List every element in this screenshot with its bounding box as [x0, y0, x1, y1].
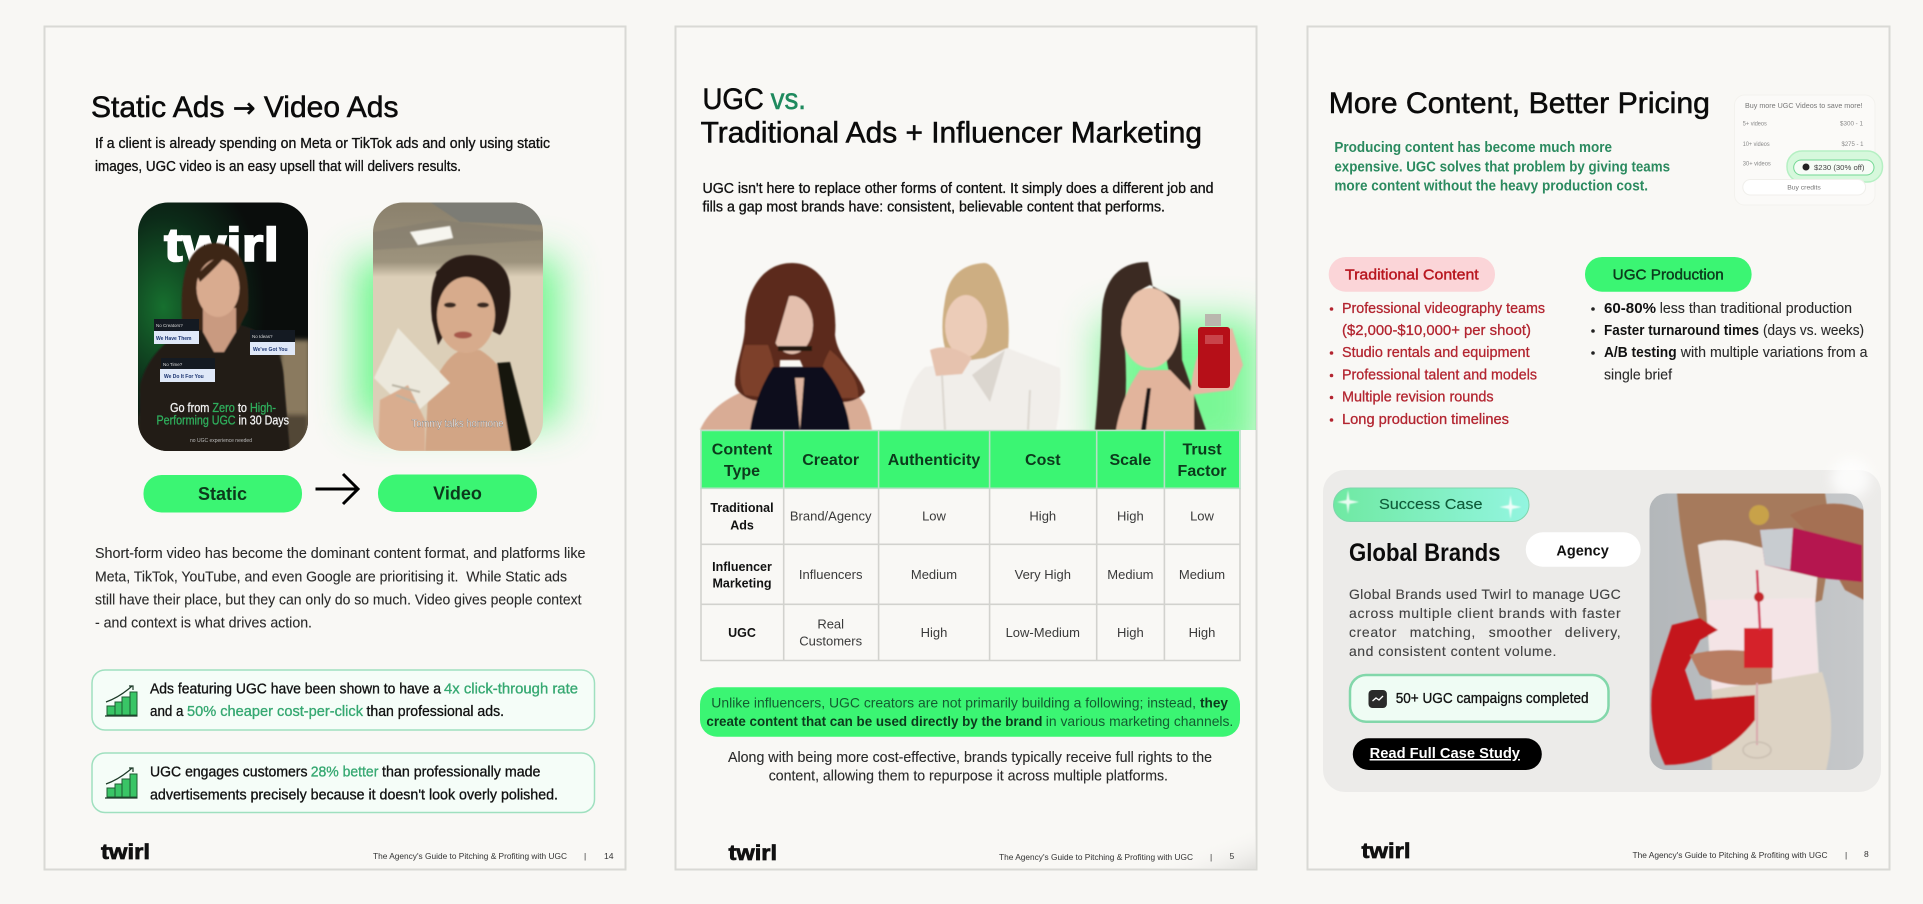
- list: ugc benefits: Faster turnaround times: [1604, 323, 1759, 339]
- case description: smoother: [1489, 624, 1552, 640]
- table header: Content: [712, 442, 773, 458]
- green intro text: expensive. UGC solves that problem by giving teams: [1334, 160, 1670, 176]
- callout: click-through rate: [92, 670, 594, 730]
- pricing card: $300 - 1: [1840, 120, 1863, 128]
- table row: influencer marketing: Medium: [1107, 567, 1154, 582]
- book: [374, 328, 450, 451]
- closing text: Along with being more cost-effective, brands typically receive full rights to the: [728, 750, 1212, 766]
- image: static ad phone: No Time?: [163, 362, 183, 367]
- table row: influencer marketing: Very High: [1015, 567, 1071, 582]
- footer: 8: [1864, 849, 1869, 859]
- table row: traditional ads: [710, 501, 1215, 532]
- table row: traditional ads: Brand/Agency: [790, 508, 872, 524]
- table row: influencer marketing: Marketing: [712, 576, 772, 590]
- sparkle: [1831, 458, 1871, 498]
- table row: traditional ads: Ads: [730, 518, 754, 532]
- table row: influencer marketing: Medium: [911, 567, 957, 582]
- table header: Authenticity: [888, 452, 980, 469]
- pricing card: 5+ videos: [1743, 120, 1767, 128]
- button: video: [378, 474, 537, 512]
- image: static ad phone: Performing UGC in 30 Days: [156, 412, 289, 428]
- callout: green note: [700, 687, 1240, 737]
- title: [701, 83, 1202, 150]
- image: static ad phone: We've Got You: [253, 347, 288, 353]
- table row: ugc: Real: [817, 616, 844, 632]
- ad headline: Go from Zero to High-: [170, 400, 276, 415]
- table row: ugc: UGC: [728, 626, 756, 640]
- pill: traditional content: [1329, 257, 1495, 292]
- pricing card: Buy more UGC Videos to save more!: [1745, 101, 1863, 110]
- arrow: [316, 474, 358, 504]
- corner shading: [1130, 820, 1256, 869]
- list: ugc benefits: with multiple variations from a: [1680, 345, 1868, 361]
- callout: green note: Unlike influencers, UGC creators are not primarily building a following; instead,: [711, 696, 1196, 710]
- person: ugc creator: [1095, 262, 1243, 430]
- case description: matching,: [1410, 624, 1475, 640]
- list: traditional costs: Professional talent and models: [1342, 368, 1537, 384]
- logo: twirl: [1362, 840, 1410, 863]
- callout: green note: create content that can be used directly by the brand: [706, 714, 1042, 729]
- intro text: fills a gap most brands have: consistent, believable content that performs.: [702, 200, 1165, 216]
- body paragraph: still have their place, but they can only do so much. Video gives people context: [95, 592, 582, 608]
- callout: click-through rate: than professional ads.: [366, 704, 504, 720]
- panel: page 8 more content better pricing: [1308, 26, 1890, 870]
- list: ugc benefits: (days vs. weeks): [1763, 323, 1864, 339]
- image: static ad phone: We Do It For You: [164, 374, 204, 380]
- footer: The Agency's Guide to Pitching & Profiting with UGC: [999, 852, 1193, 862]
- closing text: content, allowing them to repurpose it across multiple platforms.: [769, 768, 1168, 784]
- image: video glow: [355, 258, 560, 423]
- icon: growth chart: [105, 768, 138, 798]
- table row: influencer marketing: Influencer: [712, 560, 772, 574]
- list: traditional costs: Multiple revision rounds: [1342, 390, 1494, 406]
- table header: Type: [724, 463, 760, 480]
- title: More Content, Better Pricing: [1329, 87, 1710, 120]
- button: static: Static: [198, 484, 247, 504]
- table row: ugc: High: [1189, 625, 1215, 640]
- icon: trend: [1368, 690, 1387, 708]
- stat box: [1350, 675, 1608, 722]
- table row: traditional ads: Low: [1190, 508, 1215, 524]
- buy credits button: [1743, 180, 1866, 195]
- table row: ugc: [728, 616, 1215, 648]
- case heading: Global Brands: [1349, 539, 1500, 567]
- body paragraph: Meta, TikTok, YouTube, and even Google are prioritising it. While Static ads: [95, 570, 567, 586]
- body paragraph: [95, 546, 586, 632]
- table row: traditional ads: Traditional: [710, 501, 774, 515]
- case description: delivery,: [1565, 624, 1621, 640]
- buy credits button: Buy credits: [1787, 184, 1821, 192]
- logo in ad: twirl: [164, 218, 279, 271]
- list: traditional costs: Long production timelines: [1342, 412, 1509, 428]
- button: read full case study: Read Full Case Study: [1370, 745, 1521, 762]
- list: ugc benefits: [1591, 301, 1868, 384]
- callout: click-through rate: Ads featuring UGC have been shown to have a: [150, 682, 442, 698]
- image: static ad phone: [138, 202, 310, 452]
- image: ugc video phone: Tommy talks hormone: [412, 418, 504, 430]
- table header: Scale: [1109, 452, 1151, 469]
- pill: success case: Success Case: [1379, 496, 1482, 513]
- footer: The Agency's Guide to Pitching & Profiting with UGC: [373, 851, 567, 861]
- image: ugc video phone: [373, 202, 543, 452]
- image: drink pouring photo: [1649, 493, 1864, 771]
- pricing card: 30+ videos: [1743, 160, 1771, 168]
- pill: ugc production: UGC Production: [1613, 266, 1724, 284]
- case description: creator: [1349, 624, 1397, 640]
- closing text: [728, 750, 1212, 784]
- table header: Trust: [1182, 442, 1222, 458]
- image: static ad phone: No Creators?: [156, 323, 183, 328]
- callout: engagement: advertisements precisely because it doesn't look overly polished.: [150, 788, 558, 804]
- footer: The Agency's Guide to Pitching & Profiting with UGC: [1632, 850, 1828, 860]
- list: ugc benefits: A/B testing: [1604, 345, 1677, 361]
- panel: success case card: [1323, 458, 1881, 792]
- footer: 5: [1230, 851, 1234, 861]
- table row: ugc: Customers: [799, 634, 863, 648]
- list: ugc benefits: single brief: [1604, 368, 1673, 384]
- table row: ugc: Low-Medium: [1006, 625, 1080, 640]
- image: static ad phone: no UGC experience needed: [190, 438, 252, 444]
- table header: Factor: [1178, 463, 1226, 480]
- callout: green note: in various marketing channels.: [1046, 714, 1233, 729]
- table header: Cost: [1025, 452, 1061, 469]
- intro text: images, UGC video is an easy upsell that will delivers results.: [95, 159, 461, 175]
- callout: green note: they: [1200, 696, 1228, 710]
- pricing card: 10+ videos: [1743, 141, 1770, 148]
- table row: influencer marketing: [712, 560, 1225, 590]
- pill: agency: [1526, 532, 1641, 567]
- list: traditional costs: [1330, 301, 1545, 428]
- intro text: [95, 136, 550, 175]
- table row: ugc: High: [1117, 625, 1144, 640]
- image: static ad phone: No Ideas?: [252, 334, 273, 339]
- image: three people: [700, 261, 1256, 430]
- person: traditional model: [700, 263, 872, 430]
- button: read full case study: [1353, 738, 1542, 770]
- table row: traditional ads: Low: [922, 508, 947, 524]
- callout: engagement: 28% better: [311, 764, 379, 780]
- intro text: If a client is already spending on Meta or TikTok ads and only using static: [95, 136, 550, 152]
- table header: Creator: [802, 452, 859, 469]
- stat box: 50+ UGC campaigns completed: [1396, 691, 1589, 707]
- icon: perfume bottle: [1198, 314, 1230, 388]
- case description: across multiple client brands with faster: [1349, 605, 1621, 621]
- table row: traditional ads: High: [1029, 508, 1056, 524]
- highlighted price: $230 (30% off): [1814, 163, 1865, 172]
- button: video: Video: [433, 484, 482, 504]
- person: influencer: [900, 263, 1060, 430]
- footer: |: [584, 851, 586, 861]
- case description: [1349, 586, 1621, 659]
- pill: traditional content: Traditional Content: [1345, 266, 1480, 284]
- table row: ugc: High: [921, 625, 947, 640]
- comparison table: [701, 430, 1240, 660]
- panel: page 14 static ads to video ads: [44, 26, 626, 870]
- intro text: UGC isn't here to replace other forms of content. It simply does a different job and: [702, 181, 1214, 197]
- title: Traditional Ads + Influencer Marketing: [701, 116, 1202, 150]
- table row: influencer marketing: Medium: [1179, 567, 1225, 582]
- case description: Global Brands used Twirl to manage UGC: [1349, 586, 1621, 602]
- logo: twirl: [728, 842, 777, 865]
- list: traditional costs: Professional videography teams: [1342, 301, 1545, 317]
- callout: engagement: UGC engages customers: [150, 764, 308, 780]
- case description: and consistent content volume.: [1349, 643, 1556, 659]
- title: vs.: [771, 83, 806, 116]
- body paragraph: - and context is what drives action.: [95, 616, 312, 632]
- button: static: [144, 475, 302, 512]
- list: traditional costs: Studio rentals and equipment: [1342, 345, 1530, 361]
- logo: twirl: [101, 841, 150, 864]
- list: ugc benefits: less than traditional production: [1660, 301, 1852, 317]
- green intro text: more content without the heavy production cost.: [1334, 178, 1648, 194]
- table header: [701, 431, 1239, 488]
- title: UGC: [702, 83, 764, 116]
- pricing card: [1734, 95, 1882, 205]
- callout: click-through rate: and a: [150, 704, 184, 720]
- body paragraph: Short-form video has become the dominant content format, and platforms like: [95, 546, 586, 562]
- pricing card: $275 - 1: [1842, 141, 1864, 148]
- callout: click-through rate: 50% cheaper cost-per-click: [187, 704, 364, 720]
- footer: |: [1210, 852, 1212, 862]
- highlighted price: [1787, 151, 1882, 182]
- green intro text: Producing content has become much more: [1334, 140, 1612, 156]
- table row: traditional ads: High: [1117, 508, 1144, 524]
- pill: agency: Agency: [1556, 542, 1609, 560]
- title: Static Ads → Video Ads: [91, 91, 398, 124]
- intro text: [702, 181, 1214, 216]
- icon: growth chart: [105, 686, 138, 716]
- glow behind ugc creator: [1100, 320, 1260, 460]
- list: ugc benefits: 60-80%: [1604, 301, 1656, 317]
- footer: |: [1845, 850, 1847, 860]
- callout: engagement: than professionally made: [382, 764, 540, 780]
- footer: 14: [604, 851, 614, 861]
- table row: influencer marketing: Influencers: [799, 567, 863, 582]
- panel: page 5 ugc vs traditional: [676, 26, 1260, 870]
- green intro text: [1334, 140, 1670, 194]
- pill: ugc production: [1585, 257, 1752, 292]
- image: static ad phone: We Have Them: [156, 336, 192, 342]
- list: traditional costs: ($2,000-$10,000+ per shoot): [1342, 323, 1531, 339]
- pill: success case: [1334, 488, 1529, 522]
- callout: click-through rate: 4x click-through rate: [444, 682, 578, 698]
- callout: engagement: [92, 753, 594, 812]
